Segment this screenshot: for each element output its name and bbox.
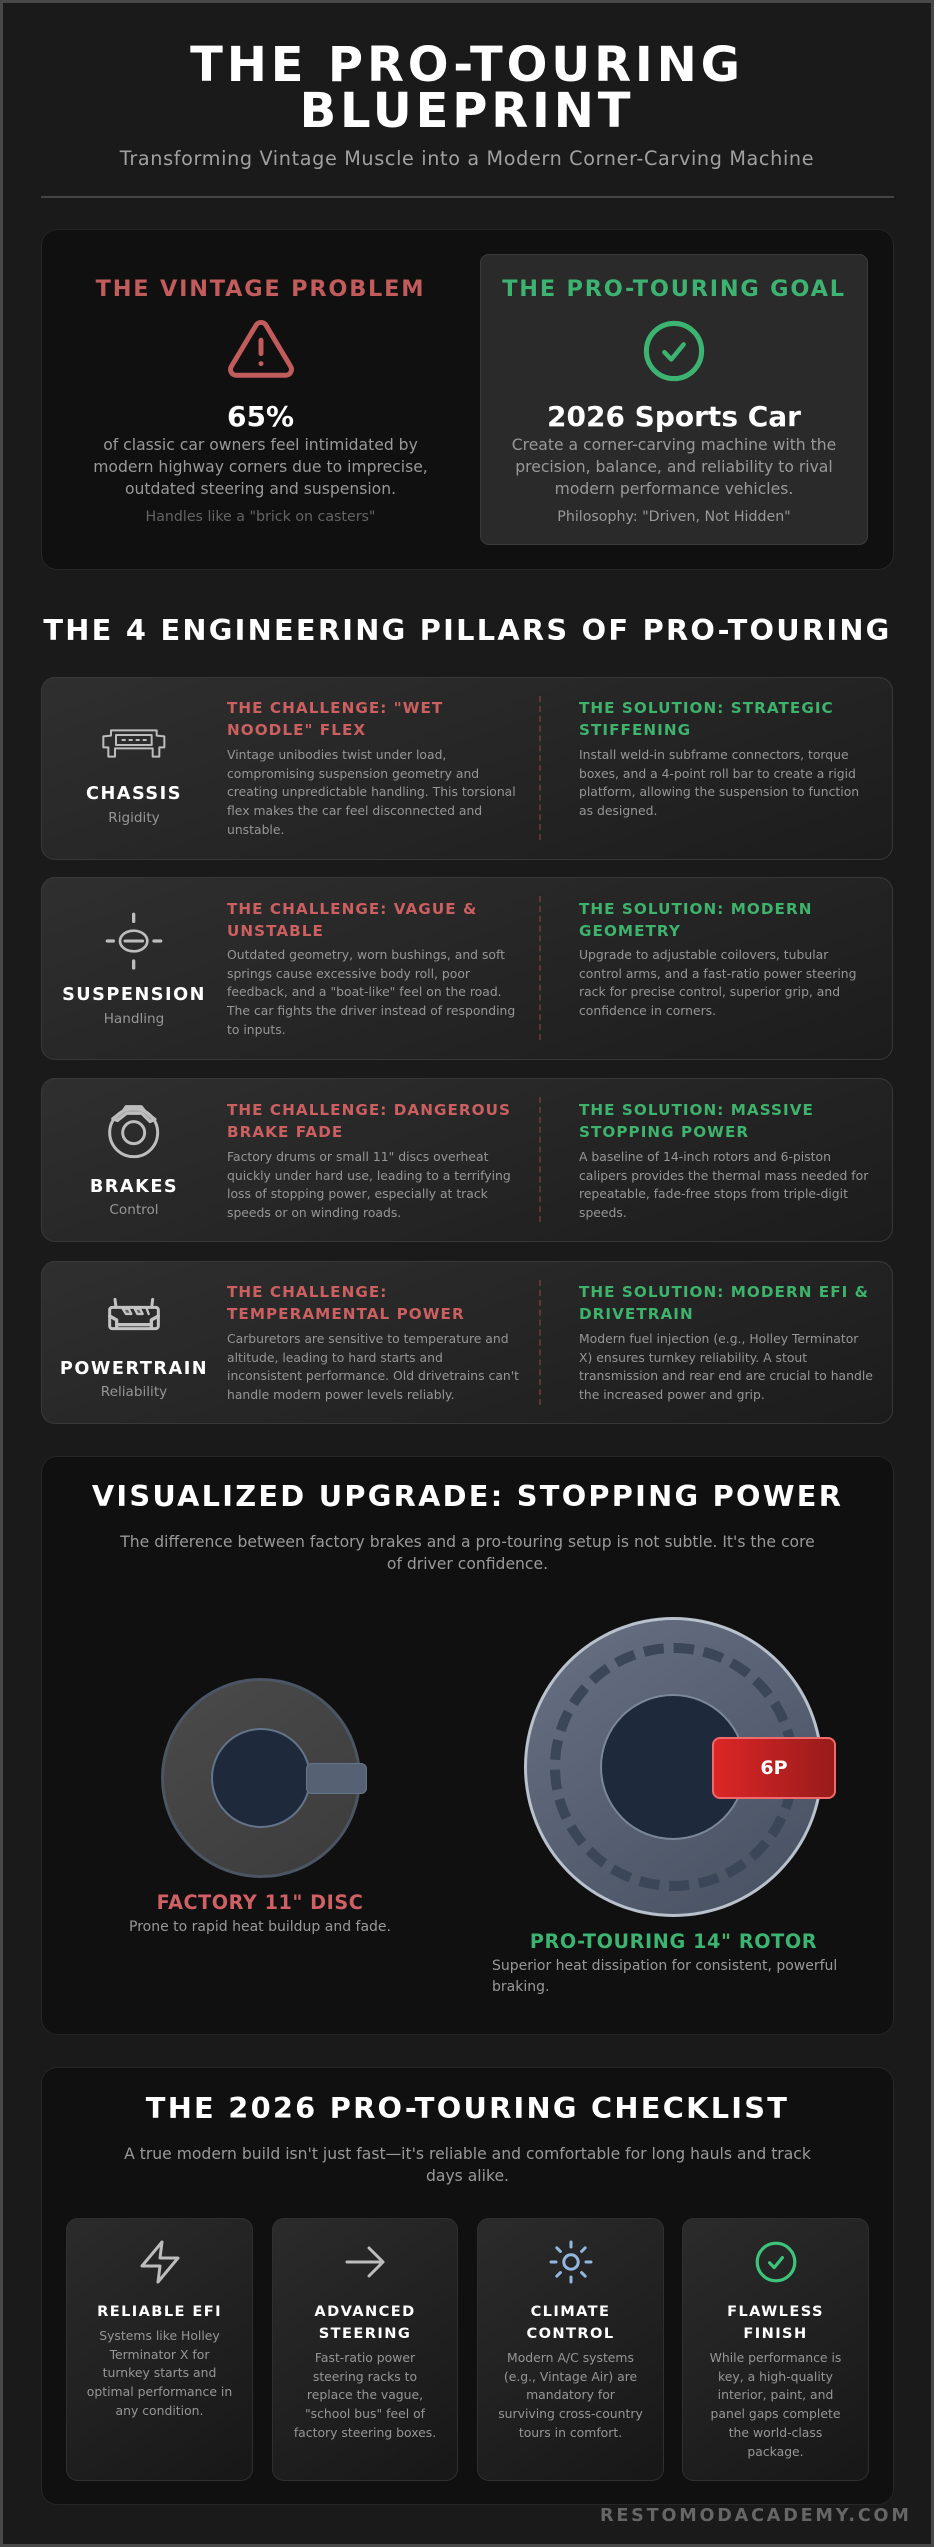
pillar card: suspension xyxy=(41,877,893,1060)
icon: powertrain xyxy=(108,1298,160,1330)
challenge heading: TEMPERAMENTAL POWER xyxy=(227,1305,465,1323)
solution text xyxy=(579,1332,873,1402)
challenge text: creating unpredictable handling. This torsional xyxy=(227,785,516,799)
icon: suspension xyxy=(106,912,162,970)
challenge text: Outdated geometry, worn bushings, and soft xyxy=(227,948,505,962)
solution heading xyxy=(579,699,834,739)
text: problem description xyxy=(93,436,428,498)
solution heading: STOPPING POWER xyxy=(579,1123,749,1141)
icon: check circle xyxy=(644,320,704,382)
diagram: factory caliper xyxy=(306,1763,367,1794)
text: problem description: modern highway corners due to imprecise, xyxy=(93,458,428,476)
diagram: rotor hub xyxy=(600,1694,746,1840)
solution text: as designed. xyxy=(579,804,657,818)
solution text: platform, allowing the suspension to function xyxy=(579,785,859,799)
card title: CLIMATE xyxy=(531,2302,610,2320)
card text xyxy=(87,2328,232,2418)
heading: pro-touring goal: THE PRO-TOURING GOAL xyxy=(502,276,846,302)
challenge text: compromising suspension geometry and xyxy=(227,767,479,781)
card text: (e.g., Vintage Air) are xyxy=(504,2369,637,2384)
solution heading: THE SOLUTION: MODERN EFI & xyxy=(579,1283,869,1301)
card title: STEERING xyxy=(319,2324,411,2342)
subtitle: Transforming Vintage Muscle into a Modern Corner-Carving Machine xyxy=(120,147,814,170)
challenge heading: THE CHALLENGE: VAGUE & xyxy=(227,900,477,918)
solution text: A baseline of 14-inch rotors and 6-piston xyxy=(579,1150,831,1164)
diagram: six-piston caliper: 6P xyxy=(760,1757,788,1779)
heading: engineering pillars: THE 4 ENGINEERING PILLARS OF PRO-TOURING xyxy=(43,613,892,647)
challenge text: inconsistent performance. Old drivetrains can't xyxy=(227,1369,519,1383)
solution text: control arms, and a fast-ratio power steering xyxy=(579,967,856,981)
challenge heading xyxy=(227,1283,465,1323)
pillar card: powertrain xyxy=(41,1261,893,1424)
label: powertrain: POWERTRAIN xyxy=(60,1358,208,1378)
card: advanced steering xyxy=(272,2218,458,2481)
card title: ADVANCED xyxy=(314,2302,416,2320)
text: goal description: Create a corner-carving machine with the xyxy=(512,436,836,454)
sublabel: reliability: Reliability xyxy=(101,1384,167,1400)
icon: warning triangle xyxy=(228,320,294,378)
solution text: calipers provides the thermal mass needed for xyxy=(579,1169,868,1183)
challenge text: loss of stopping power, especially at track xyxy=(227,1187,488,1201)
title: BLUEPRINT xyxy=(300,83,634,139)
icon: sun xyxy=(550,2240,592,2284)
challenge heading: THE CHALLENGE: "WET xyxy=(227,699,443,717)
diagram: six-piston caliper xyxy=(712,1737,836,1799)
card title xyxy=(526,2302,615,2342)
diagram: cooling vents xyxy=(550,1643,798,1891)
text: intro xyxy=(120,1533,815,1573)
label: brakes: BRAKES xyxy=(90,1176,178,1196)
solution text: confidence in corners. xyxy=(579,1004,716,1018)
card text: turnkey starts and xyxy=(103,2365,216,2380)
pillar card: chassis xyxy=(41,677,893,860)
solution heading: THE SOLUTION: MODERN xyxy=(579,900,812,918)
heading: vintage problem: THE VINTAGE PROBLEM xyxy=(96,276,425,302)
card title: FLAWLESS xyxy=(727,2302,824,2320)
card: flawless finish xyxy=(682,2218,869,2481)
column: the vintage problem xyxy=(93,276,428,525)
title xyxy=(190,37,744,139)
card text: Systems like Holley xyxy=(99,2328,220,2343)
group: pro-touring rotor xyxy=(492,1617,837,1995)
card text: optimal performance in xyxy=(87,2384,232,2399)
challenge text: Carburetors are sensitive to temperature and xyxy=(227,1332,509,1346)
solution text: transmission and rear end are crucial to handle xyxy=(579,1369,873,1383)
card: reliable EFI xyxy=(66,2218,253,2481)
note: brick on casters: Handles like a "brick on casters" xyxy=(146,509,375,525)
icon: arrow xyxy=(346,2246,384,2278)
text: rotor note: Superior heat dissipation for consistent, powerful xyxy=(492,1958,837,1974)
icon: brakes xyxy=(108,1105,160,1158)
text: problem description: of classic car owners feel intimidated by xyxy=(103,436,418,454)
solution text xyxy=(579,948,856,1018)
solution text: the increased power and grip. xyxy=(579,1388,765,1402)
stat: 65 percent: 65% xyxy=(227,400,294,433)
label: suspension: SUSPENSION xyxy=(62,984,206,1004)
solution heading: THE SOLUTION: STRATEGIC xyxy=(579,699,834,717)
solution text: X) ensures turnkey reliability. A stout xyxy=(579,1351,807,1365)
note: philosophy: Philosophy: "Driven, Not Hidden" xyxy=(557,509,791,525)
panel: problem and goal xyxy=(41,229,894,570)
challenge text xyxy=(226,948,515,1037)
challenge text: feedback, and a "boat-like" feel on the road. xyxy=(227,985,502,999)
challenge text: Factory drums or small 11" discs overheat xyxy=(227,1150,488,1164)
icon: chassis xyxy=(102,729,166,758)
text: goal description: precision, balance, and reliability to rival xyxy=(515,458,833,476)
challenge text xyxy=(227,1332,519,1402)
card title xyxy=(314,2302,416,2342)
card text: any condition. xyxy=(116,2403,203,2418)
text: goal description: modern performance vehicles. xyxy=(555,480,793,498)
challenge heading xyxy=(227,1101,511,1141)
text: factory disc note: Prone to rapid heat buildup and fade. xyxy=(129,1919,391,1935)
text: problem description: outdated steering and suspension. xyxy=(125,480,396,498)
card title: CONTROL xyxy=(526,2324,615,2342)
challenge text: handle modern power levels reliably. xyxy=(227,1388,455,1402)
card text: interior, paint, and xyxy=(718,2387,833,2402)
card title: RELIABLE EFI xyxy=(97,2302,222,2320)
solution heading: STIFFENING xyxy=(579,721,691,739)
solution heading: THE SOLUTION: MASSIVE xyxy=(579,1101,814,1119)
card text: factory steering boxes. xyxy=(294,2425,436,2440)
text: goal description xyxy=(512,436,836,498)
challenge text: altitude, leading to hard starts and xyxy=(227,1351,443,1365)
sublabel: rigidity: Rigidity xyxy=(108,810,160,826)
sublabel: control: Control xyxy=(109,1202,159,1218)
card: climate control xyxy=(477,2218,664,2481)
card text: mandatory for xyxy=(526,2387,615,2402)
challenge text: flex makes the car feel disconnected and xyxy=(227,804,482,818)
solution heading xyxy=(579,1283,869,1323)
card text: Fast-ratio power xyxy=(315,2350,415,2365)
solution text: speeds. xyxy=(579,1206,627,1220)
card text: While performance is xyxy=(710,2350,841,2365)
title: THE PRO-TOURING xyxy=(190,37,744,93)
card text: panel gaps complete xyxy=(711,2406,840,2421)
challenge text xyxy=(227,748,516,837)
footer: website: RESTOMODACADEMY.COM xyxy=(600,2506,912,2526)
card text: tours in comfort. xyxy=(519,2425,622,2440)
solution heading xyxy=(579,900,812,940)
card text: surviving cross-country xyxy=(498,2406,643,2421)
challenge heading xyxy=(227,900,477,940)
heading: checklist: THE 2026 PRO-TOURING CHECKLIST xyxy=(146,2091,789,2125)
text: rotor note: braking. xyxy=(492,1979,549,1995)
card text: "school bus" feel of xyxy=(305,2406,425,2421)
challenge heading: UNSTABLE xyxy=(227,922,324,940)
pillar card: brakes xyxy=(41,1078,893,1242)
text: checklist intro: A true modern build isn't just fast—it's reliable and comfortable for long hauls and track xyxy=(124,2145,811,2163)
solution text: Upgrade to adjustable coilovers, tubular xyxy=(579,948,828,962)
label: factory disc: FACTORY 11" DISC xyxy=(157,1891,363,1914)
card text: steering racks to xyxy=(313,2369,417,2384)
solution text: rack for precise control, superior grip, and xyxy=(579,985,840,999)
challenge heading: THE CHALLENGE: DANGEROUS xyxy=(227,1101,511,1119)
challenge text: Vintage unibodies twist under load, xyxy=(227,748,446,762)
solution heading xyxy=(579,1101,814,1141)
panel: checklist xyxy=(41,2067,894,2505)
label: pro-touring rotor: PRO-TOURING 14" ROTOR xyxy=(530,1930,817,1952)
challenge heading xyxy=(227,699,443,739)
solution text xyxy=(579,748,859,818)
solution heading: GEOMETRY xyxy=(579,922,681,940)
challenge heading: BRAKE FADE xyxy=(227,1123,343,1141)
challenge text: speeds or on winding roads. xyxy=(227,1206,401,1220)
challenge heading: THE CHALLENGE: xyxy=(227,1283,387,1301)
card text: Modern A/C systems xyxy=(507,2350,634,2365)
challenge text: quickly under hard use, leading to a terrifying xyxy=(227,1169,511,1183)
challenge heading: NOODLE" FLEX xyxy=(227,721,366,739)
card text: replace the vague, xyxy=(307,2387,423,2402)
card title: FINISH xyxy=(743,2324,808,2342)
solution text xyxy=(579,1150,868,1220)
panel: visualized upgrade xyxy=(41,1456,894,2035)
column: the pro-touring goal xyxy=(480,254,868,545)
label: chassis: CHASSIS xyxy=(86,784,182,804)
solution text: boxes, and a 4-point roll bar to create a rigid xyxy=(579,767,856,781)
challenge text: springs cause excessive body roll, poor xyxy=(227,967,470,981)
solution heading: DRIVETRAIN xyxy=(579,1305,694,1323)
icon: check circle xyxy=(756,2242,796,2282)
card text xyxy=(294,2350,436,2440)
diagram: pro-touring rotor xyxy=(524,1617,823,1917)
card text: Terminator X for xyxy=(110,2347,209,2362)
text: rotor note xyxy=(492,1958,837,1995)
sublabel: handling: Handling xyxy=(104,1010,164,1026)
heading: visualized upgrade: VISUALIZED UPGRADE: STOPPING POWER xyxy=(92,1479,843,1513)
text: intro: of driver confidence. xyxy=(387,1555,548,1573)
card text: the world-class xyxy=(729,2425,822,2440)
diagram: disc hub xyxy=(211,1728,311,1828)
diagram: factory disc xyxy=(161,1678,361,1878)
challenge text: to inputs. xyxy=(227,1023,286,1037)
challenge text xyxy=(227,1150,511,1220)
challenge text: unstable. xyxy=(227,823,284,837)
card title xyxy=(682,2300,869,2344)
card text xyxy=(498,2350,643,2440)
card text: package. xyxy=(747,2444,804,2459)
text: intro: The difference between factory brakes and a pro-touring setup is not subtle. It's the core xyxy=(120,1533,815,1551)
group: factory disc xyxy=(129,1678,391,1935)
text: checklist intro: days alike. xyxy=(426,2167,509,2185)
card text: key, a high-quality xyxy=(718,2369,833,2384)
solution text: Install weld-in subframe connectors, torque xyxy=(579,748,849,762)
card text xyxy=(682,2349,869,2461)
icon: lightning bolt xyxy=(140,2240,180,2284)
challenge text: The car fights the driver instead of responding xyxy=(227,1004,515,1018)
stat: 2026 sports car: 2026 Sports Car xyxy=(547,400,801,433)
solution text: repeatable, fade-free stops from triple-digit xyxy=(579,1187,848,1201)
text: checklist intro xyxy=(124,2145,811,2185)
solution text: Modern fuel injection (e.g., Holley Terminator xyxy=(579,1332,858,1346)
